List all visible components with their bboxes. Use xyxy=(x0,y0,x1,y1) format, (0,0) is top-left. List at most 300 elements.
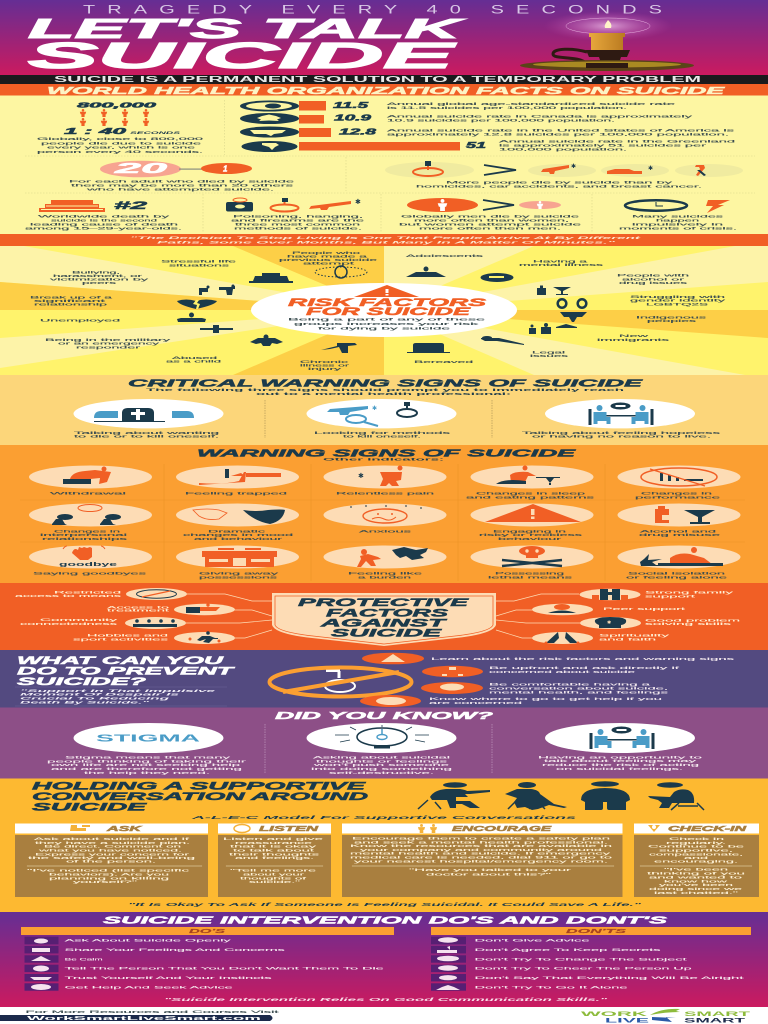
risk factor labels: gender identity xyxy=(630,298,725,303)
intro text: The following three signs should prompt you to immediately reach xyxy=(146,387,626,392)
action items: Know where to go to get help if you xyxy=(429,696,662,701)
risk factor labels: Indigenous xyxy=(636,314,706,319)
card: listen: "Tell me more xyxy=(230,868,316,873)
card: listen xyxy=(218,824,331,897)
card: ask: Express your concern for xyxy=(35,851,191,856)
icon: noose xyxy=(413,161,443,176)
fact: asking about suicidal thoughts: into doing something xyxy=(311,766,452,771)
factor ovals and icons: ✱ xyxy=(607,620,611,626)
sub heading: Other indicators: xyxy=(323,457,444,462)
indicator captions: risky or reckless xyxy=(479,532,582,537)
stat: 800,000 per 40 seconds: people die due to suicide xyxy=(41,140,201,145)
indicator captions: Dramatic xyxy=(208,528,265,533)
icon: gun, car, ribbon: ✱ xyxy=(571,163,576,170)
chart: suicide rate bars xyxy=(240,100,735,152)
stat: suicide vs other deaths xyxy=(385,161,743,189)
fact: stigma: the help they need. xyxy=(84,770,210,775)
heading: CRITICAL WARNING SIGNS OF SUICIDE xyxy=(128,378,645,390)
factor labels: treatment xyxy=(107,608,172,613)
card: check-in: and xyxy=(684,855,708,860)
logo: WORK xyxy=(581,1011,648,1018)
indicator captions: Changes in xyxy=(641,490,712,495)
action items: Learn about the risk factors and warning signs xyxy=(431,656,734,661)
subtitle band: SUICIDE IS A PERMANENT SOLUTION TO A TEMPORARY PROBLEM xyxy=(54,75,702,84)
card: ask: planning on killing xyxy=(49,875,169,880)
indicator captions: Changes in xyxy=(54,528,120,533)
risk factor labels: attempt xyxy=(303,261,358,266)
risk factor labels: Struggling with xyxy=(630,294,725,299)
indicator icons: ✱ xyxy=(358,472,364,480)
indicator icons xyxy=(52,466,723,568)
indicator ovals xyxy=(29,466,740,568)
risk factor labels: Abused xyxy=(172,355,217,360)
fact: opportunity to talk: talk about feelings may xyxy=(544,758,696,763)
card: encourage: Encourage them to create a safety plan xyxy=(352,835,610,840)
risk factor centre badge: FOR SUICIDE xyxy=(306,306,472,318)
fact: stigma: STIGMA xyxy=(96,733,201,745)
card: check-in: "I've been xyxy=(664,867,728,872)
footer link xyxy=(0,1009,282,1022)
do's column: Trust Yourself And Your Instincts xyxy=(65,975,272,980)
risk factor centre badge xyxy=(251,283,517,337)
fact: opportunity to talk: reduce the risk of acting xyxy=(542,762,699,767)
card: check-in: know how xyxy=(664,878,728,883)
do's column: Get Help And Seek Advice xyxy=(65,984,233,989)
card: ask: ASK xyxy=(105,824,142,833)
risk factor labels: Legal xyxy=(532,350,565,355)
risk factor labels: situations xyxy=(169,263,229,268)
card: check-in: compassionate, xyxy=(649,851,743,856)
fact: stigma: Stigma means that many xyxy=(65,754,230,759)
card: encourage: your company and community around xyxy=(360,847,602,852)
shield: PROTECTIVE xyxy=(298,597,470,609)
fact: asking about suicidal thoughts xyxy=(306,723,456,775)
card: encourage xyxy=(342,824,622,897)
risk factor labels: Being in the military xyxy=(45,337,170,342)
subtitle band xyxy=(0,75,768,84)
conversation figures xyxy=(418,781,704,810)
stat: 800,000 per 40 seconds: 800,000 xyxy=(77,100,158,110)
quote xyxy=(15,687,227,706)
chart: suicide rate bars: 11.5 xyxy=(333,101,369,110)
card: listen: and feelings. xyxy=(235,855,314,860)
risk factor labels: peoples xyxy=(647,318,696,323)
risk factor labels: peers xyxy=(82,280,116,285)
stat: second leading cause: suicide is the second xyxy=(51,218,157,223)
stat: suicide vs other deaths: homicides, car accidents, and breast cancer. xyxy=(416,184,702,189)
card: check-in xyxy=(634,824,759,897)
risk factor centre badge: Being a part of any of these xyxy=(288,317,485,322)
indicator captions: possessions xyxy=(199,574,277,579)
risk factor labels: significant xyxy=(34,298,109,303)
indicator captions: Feeling trapped xyxy=(185,490,287,495)
fact: opportunity to talk xyxy=(538,723,702,771)
shield xyxy=(272,593,496,646)
panel: what can you do xyxy=(0,650,768,708)
stat: second leading cause: #2 xyxy=(114,200,147,212)
factor labels: Good problem xyxy=(645,617,740,622)
factor labels: connectedness xyxy=(20,621,117,626)
indicator icons: goodbye xyxy=(59,562,118,568)
sign: talking about wanting to die: to die or to kill oneself. xyxy=(74,434,219,439)
stat: common methods xyxy=(226,198,364,231)
quote: Crucial To Reducing xyxy=(20,695,171,700)
risk factor labels: have made a xyxy=(287,254,370,259)
risk factor labels: victimization by xyxy=(50,276,148,281)
stat: suicide vs other deaths: More people die by suicide than by xyxy=(446,180,672,185)
card: listen: about your xyxy=(243,871,306,876)
heading: SUICIDE? xyxy=(17,676,147,688)
card: check-in: Continue to be xyxy=(648,844,744,849)
heading: SUICIDE xyxy=(32,802,148,814)
card: check-in: encouraging. xyxy=(654,859,738,864)
indicator captions: relationships xyxy=(42,536,127,541)
stat: second leading cause: among 15–29-year-olds. xyxy=(25,226,182,231)
quote: Moment Of Despair Is xyxy=(20,692,182,697)
risk factor labels: Having a xyxy=(533,258,590,263)
factor labels: Strong family xyxy=(645,589,733,594)
card: ask: yourself?" xyxy=(73,879,139,884)
indicator captions: or feeling alone xyxy=(626,574,727,579)
card: encourage: Know the resources that are available in xyxy=(350,843,612,848)
risk factor labels: LGBTQ2S xyxy=(646,301,709,306)
heading: CONVERSATION AROUND xyxy=(32,791,368,803)
stat: men vs women: more often then men. xyxy=(419,226,561,231)
card: listen: Listen and give xyxy=(223,836,323,841)
risk factor labels: illness or xyxy=(300,362,351,368)
card: encourage: your nearest hospital/emergency room. xyxy=(354,858,608,863)
sign: looking for methods: ✱ xyxy=(372,405,377,412)
icon: gun, car, ribbon xyxy=(541,163,706,176)
action items: Be comfortable having a xyxy=(489,681,653,686)
model title: A-L-E-C Model For Supportive Conversations xyxy=(188,815,579,820)
risk factor labels: alcohol or xyxy=(622,276,687,281)
indicator captions: Possessing xyxy=(495,570,564,575)
stat: impulsive moments xyxy=(619,200,737,231)
risk factor icons xyxy=(177,266,587,353)
card: encourage: ENCOURAGE xyxy=(452,824,553,833)
heading: WHO facts: WORLD HEALTH ORGANIZATION FACTS ON SUICIDE xyxy=(47,85,726,97)
don'ts column: DON'TS xyxy=(566,929,627,935)
indicator captions: Alcohol and xyxy=(640,528,716,533)
indicator captions xyxy=(33,490,727,579)
main title xyxy=(28,13,465,76)
risk factor labels: or an emergency xyxy=(58,341,159,346)
stat: men vs women: more often than women, xyxy=(414,218,569,223)
footer link: For More Resources and Courses Visit xyxy=(26,1009,282,1014)
panel: did you know xyxy=(0,708,768,778)
stat: impulsive moments: impulsively in xyxy=(632,222,723,227)
main title: LET'S TALK xyxy=(28,13,465,44)
card: ask: behaviors). Are you xyxy=(49,871,169,876)
factor labels: support xyxy=(645,593,699,598)
card: listen: thoughts of xyxy=(240,875,309,880)
action items: Be upfront and ask directly if xyxy=(489,665,683,670)
logo: SMART xyxy=(684,1011,750,1018)
factor labels: Peer support xyxy=(603,606,688,611)
indicator captions: Relentless pain xyxy=(336,490,434,495)
stat: impulsive moments: moments of crisis. xyxy=(619,226,737,231)
heading: DO TO PREVENT xyxy=(17,665,236,677)
do's column: DO'S xyxy=(189,929,226,935)
card: check-in: Check in xyxy=(669,836,724,841)
indicator captions: Feeling like xyxy=(348,570,422,575)
indicator captions: lethal means xyxy=(488,574,572,579)
chart: suicide rate bars: is approximately 51 suicides per xyxy=(499,143,709,148)
risk factor labels xyxy=(30,250,725,371)
panel: risk factors xyxy=(0,246,768,375)
risk factor labels: immigrants xyxy=(597,337,669,342)
stat: common methods: and firearms are the xyxy=(231,218,364,223)
quote band xyxy=(0,234,768,246)
indicator captions: Engaging in xyxy=(493,528,566,533)
stat: 20 to 1 attempts: For each adult who died by suicide xyxy=(69,179,294,184)
icon: greater than xyxy=(484,165,516,175)
card: encourage: mental health and suicide. If emergency xyxy=(350,851,610,856)
stat: 800,000 per 40 seconds: Globally, close to 800,000 xyxy=(37,136,206,141)
stat: 20 to 1 attempts: 1 xyxy=(223,164,228,174)
indicator captions: performance xyxy=(635,494,720,499)
stat: 800,000 per 40 seconds: person every 40 seconds. xyxy=(37,149,203,154)
card: listen: to talk about xyxy=(233,847,317,852)
fact: stigma xyxy=(47,723,249,775)
indicator captions: Anxious xyxy=(359,528,411,533)
stat: second leading cause: leading cause of death xyxy=(30,222,178,227)
risk factor labels: New xyxy=(619,333,649,338)
action items: conversation about suicide, xyxy=(489,685,668,690)
risk factor labels: People who xyxy=(292,250,360,255)
stat: 800,000 per 40 seconds: every year, which is one xyxy=(47,144,195,150)
card: check-in: doing since we xyxy=(649,886,742,891)
fact: opportunity to talk: on suicidal feelings. xyxy=(556,766,683,771)
icon: candle xyxy=(520,11,694,71)
do's column: Be Calm xyxy=(65,956,103,961)
card: ask: Be direct. Comment on xyxy=(44,844,181,849)
card: check-in: supportive, xyxy=(659,847,733,852)
indicator captions: drug misuse xyxy=(639,532,720,537)
stat: common methods: Poisoning, hanging, xyxy=(233,214,363,219)
risk factor labels: previous suicide xyxy=(279,257,377,262)
fact: asking about suicidal thoughts: self-destructive. xyxy=(329,770,434,775)
chart: suicide rate bars: Annual suicide rate in Canada is approximately xyxy=(387,114,692,119)
risk factor labels: Adolescents xyxy=(406,253,483,258)
chart: suicide rate bars: 10.9 suicides per 100,000 population. xyxy=(387,118,615,123)
panel: WHO facts xyxy=(0,96,768,234)
indicator captions: and eating patterns xyxy=(466,494,594,499)
indicator captions: Saying goodbyes xyxy=(33,570,146,575)
stat: 20 to 1 attempts: 20 xyxy=(112,160,169,177)
heading: SUICIDE INTERVENTION DO'S AND DONT'S xyxy=(103,914,667,926)
intro text xyxy=(146,387,626,396)
stat: 20 to 1 attempts xyxy=(69,160,294,191)
panel: protective factors xyxy=(0,583,768,650)
risk factor centre badge: groups increases your risk xyxy=(294,321,478,326)
action items: concerned about suicide xyxy=(489,669,635,674)
card: encourage: doctor about this?" xyxy=(426,871,553,876)
risk factor labels: Unemployed xyxy=(40,318,120,323)
factor labels: Access to xyxy=(107,604,169,609)
card: listen: reassurance xyxy=(235,840,312,845)
sign: looking for methods: Looking for methods xyxy=(314,430,450,435)
shield: FACTORS xyxy=(326,608,450,620)
heading xyxy=(17,655,236,688)
stat: men vs women: Globally men die by suicide xyxy=(401,214,579,219)
icon: gun, car, ribbon: ✱ xyxy=(648,165,653,172)
stat: men vs women xyxy=(399,198,581,231)
do's column: Share Your Feelings And Concerns xyxy=(65,947,285,952)
card: ask: what you have noticed. xyxy=(39,847,182,852)
factor labels: Restricted xyxy=(54,589,121,594)
indicator captions: interpersonal xyxy=(40,532,127,537)
risk factor labels: responder xyxy=(76,344,143,349)
fact: stigma: own life are not seeking help xyxy=(51,762,240,767)
fact: opportunity to talk: Having an opportunity to xyxy=(538,754,702,759)
risk factor labels: Stressful life xyxy=(161,259,236,264)
risk factor labels: Chronic xyxy=(300,359,348,364)
card: ask xyxy=(15,824,208,897)
risk factor labels: People with xyxy=(617,273,689,278)
action items: mental health, and feelings xyxy=(489,689,668,694)
stat: second leading cause: Worldwide death by xyxy=(38,214,169,219)
heading: HOLDING A SUPPORTIVE xyxy=(32,780,367,792)
panel: warning signs xyxy=(0,445,768,583)
chart: suicide rate bars: Annual global age-standardized suicide rate xyxy=(387,101,675,106)
don'ts column: Don't Try To Go It Alone xyxy=(474,984,628,989)
do's column: Ask About Suicide Openly xyxy=(65,938,231,943)
factor ovals and icons xyxy=(125,588,641,644)
risk factor labels: drug issues xyxy=(619,280,687,285)
stat: 20 to 1 attempts: who have attempted suicide. xyxy=(87,186,274,191)
stat: 800,000 per 40 seconds: 1 : 40 xyxy=(64,126,127,136)
factor labels: and faith xyxy=(599,636,656,641)
card: encourage: and seek a mental health professional. xyxy=(354,839,608,844)
fact: stigma: people thinking of taking their xyxy=(47,758,249,763)
risk factor labels: harassment, or xyxy=(53,273,144,278)
risk factor labels: injury xyxy=(308,366,341,371)
do's column: Tell The Person That You Don't Want Them To Die xyxy=(65,966,384,971)
indicator captions: Withdrawal xyxy=(50,490,127,495)
quote: Death By Suicide." xyxy=(20,699,149,704)
heading: WHO facts xyxy=(0,84,768,97)
chart: suicide rate bars: 12.8 xyxy=(339,128,377,137)
indicator captions: changes in mood xyxy=(183,532,293,537)
panel: supportive conversation xyxy=(0,778,768,912)
shield: AGAINST xyxy=(318,618,448,630)
do's column xyxy=(21,927,394,991)
card: check-in: thinking of you xyxy=(647,870,745,875)
sign: talking about wanting to die: Talking about wanting xyxy=(74,430,219,435)
don'ts column xyxy=(431,927,751,991)
action items xyxy=(360,653,734,707)
card: check-in: CHECK-IN xyxy=(668,824,747,833)
stat: 20 to 1 attempts: there may be more than 20 others xyxy=(71,183,293,188)
card: listen: their thoughts xyxy=(229,851,319,856)
card: ask: "I've noticed (list specific xyxy=(27,868,189,873)
indicator captions: a burden xyxy=(358,574,411,579)
heading: DID YOU KNOW? xyxy=(275,710,494,722)
card: listen: LISTEN xyxy=(259,824,319,833)
card: listen: suicide." xyxy=(249,879,302,884)
card: check-in: regularly. xyxy=(666,840,726,845)
heading xyxy=(32,780,368,814)
fact: asking about suicidal thoughts: won't push someone xyxy=(314,762,449,767)
don'ts column: Don't Agree To Keep Secrets xyxy=(474,947,661,952)
header banner xyxy=(0,0,768,76)
stat: impulsive moments: Many suicides xyxy=(632,214,723,219)
risk factor centre badge: RISK FACTORS xyxy=(288,297,488,309)
don'ts column: Don't Give Advice xyxy=(474,938,590,943)
panel: critical warning signs xyxy=(0,375,768,445)
sign: feeling hopeless: Talking about feeling hopeless xyxy=(522,430,720,435)
quote: "Suicide Intervention Relies On Good Communication Skills." xyxy=(164,997,610,1002)
factor labels xyxy=(15,589,740,642)
card: listen: that it is okay xyxy=(230,844,316,849)
fact: stigma: and are therefore not getting xyxy=(51,766,242,771)
indicator captions: Social isolation xyxy=(628,570,725,575)
factor labels: sport activities xyxy=(73,637,168,642)
factor labels: Spirituality xyxy=(599,632,669,637)
indicator captions: Changes in sleep xyxy=(476,490,585,495)
shield: SUICIDE xyxy=(331,628,443,640)
stat: common methods: ✱ xyxy=(355,198,361,206)
action items: are concerned xyxy=(429,700,522,705)
card: ask: of the person. xyxy=(66,859,156,864)
sign: looking for methods: to kill oneself. xyxy=(343,434,421,439)
stat: men vs women: but women attempt suicide xyxy=(399,222,581,227)
don'ts column: Don't Try To Cheer The Person Up xyxy=(474,966,692,971)
card: ask: Ask about suicide and if xyxy=(34,836,192,841)
chart: suicide rate bars: approximately 12.8 suicides per 100,000 population. xyxy=(387,131,729,136)
risk factor centre badge: for dying by suicide xyxy=(318,325,450,330)
factor labels: solving skills xyxy=(645,621,731,626)
fact: asking about suicidal thoughts: thoughts or feelings xyxy=(316,758,447,763)
factor labels: Community xyxy=(40,617,117,622)
icon: prohibited noose xyxy=(270,667,412,696)
chart: suicide rate bars: is 11.5 suicides per 100,000 population. xyxy=(387,105,627,110)
sign: looking for methods xyxy=(306,399,456,439)
don'ts column: Don't Try To Change The Subject xyxy=(474,956,690,961)
footer xyxy=(0,1007,768,1024)
chart: suicide rate bars: 51 xyxy=(466,141,487,150)
card: encourage: medical care is needed, dial 911 or go to xyxy=(350,855,612,860)
sign: feeling hopeless: or having no reason to live. xyxy=(532,434,711,439)
fact: asking about suicidal thoughts: Asking about suicidal xyxy=(313,754,450,759)
card: check-in: you've been xyxy=(659,882,733,887)
risk factor labels: issues xyxy=(530,353,568,358)
chart: suicide rate bars: 10.9 xyxy=(334,114,372,123)
card: ask: they have a suicide plan. xyxy=(35,840,190,845)
chart: suicide rate bars: Annual suicide rate in the Greenland xyxy=(499,139,735,144)
tagline: TRAGEDY EVERY 40 SECONDS xyxy=(83,4,674,16)
panel: do's and don'ts xyxy=(0,912,768,1007)
risk factor labels: Bullying, xyxy=(72,269,120,274)
risk factor labels: Bereaved xyxy=(414,359,473,364)
stat: 800,000 per 40 seconds: SECONDS xyxy=(130,131,182,135)
heading: WARNING SIGNS OF SUICIDE xyxy=(197,448,578,460)
quote: "Support In That Impulsive xyxy=(20,688,218,693)
chart: suicide rate bars: 100,000 population. xyxy=(499,147,627,152)
risk factor labels: mental illness xyxy=(519,262,603,267)
sign: talking about wanting to die xyxy=(74,399,224,439)
card: ask: the safety and well-being xyxy=(28,855,195,860)
indicator captions: behaviour xyxy=(498,536,564,541)
chart: suicide rate bars: Annual suicide rate in the United States of America is xyxy=(387,127,734,132)
factor labels: access to means xyxy=(15,593,121,598)
card: check-in: and wanted to xyxy=(649,874,742,879)
stat: impulsive moments: happen xyxy=(656,218,699,223)
indicator captions: Giving away xyxy=(199,570,278,575)
risk factor labels: relationship xyxy=(34,302,107,307)
